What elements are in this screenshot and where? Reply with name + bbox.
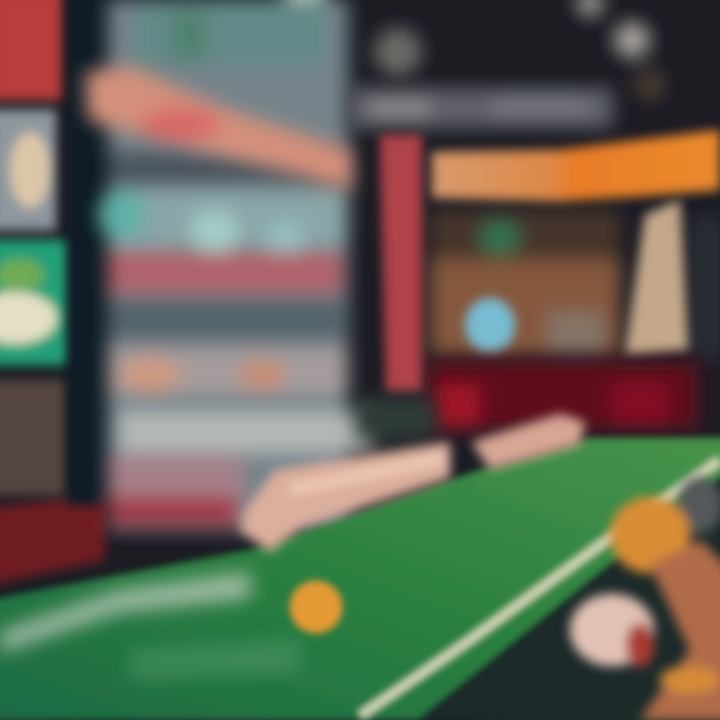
panel: dark floor edge — [355, 398, 435, 440]
panel: faint overhead sign — [348, 88, 613, 128]
panel: upper pink-orange band — [85, 66, 352, 190]
panel: cushion right — [472, 414, 585, 470]
panel: red seating — [428, 362, 698, 430]
panel: green felt table — [0, 438, 720, 720]
panel: orange banner — [432, 130, 720, 202]
panel: dark pillar — [68, 0, 106, 505]
icon: blue wall screen — [465, 298, 515, 352]
panel: centre red column — [380, 135, 422, 392]
panel: cushion left — [240, 442, 450, 552]
panel: hand in foreground — [570, 477, 720, 720]
panel: left screens column — [0, 0, 105, 585]
panel: table markings — [0, 572, 300, 680]
panel: white table edge line — [360, 460, 720, 716]
panel: tan column — [625, 200, 688, 355]
panel: bottom-right dark corner — [420, 478, 720, 720]
panel: ceiling lights — [283, 0, 666, 101]
icon: orange ball — [290, 581, 342, 633]
panel: shelving wall — [98, 0, 373, 530]
panel: back wall — [430, 210, 720, 360]
